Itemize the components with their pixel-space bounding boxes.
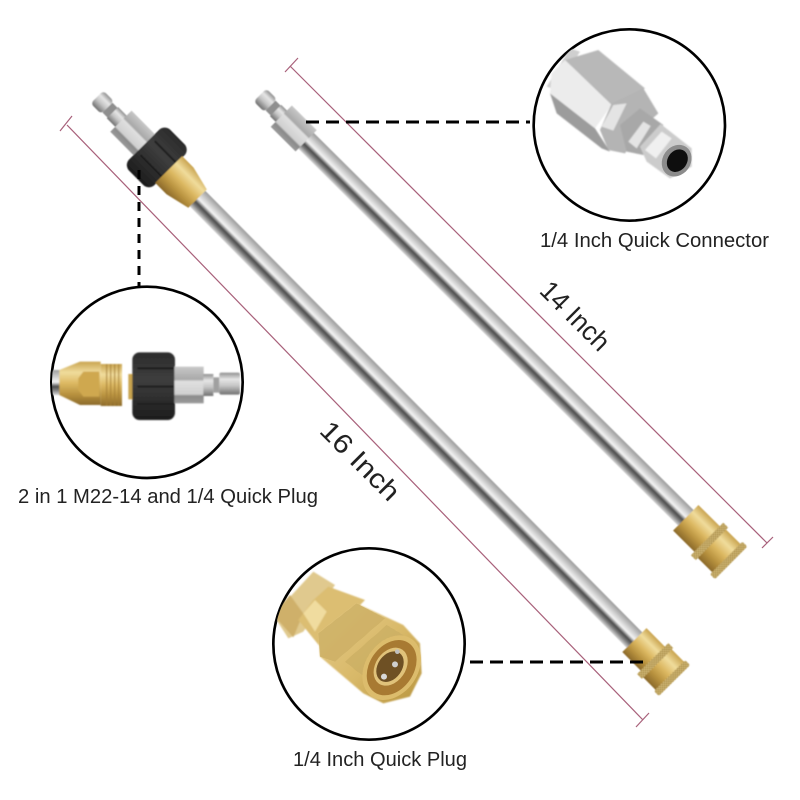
brass thread	[101, 364, 122, 406]
dashed leader: coupler	[138, 170, 140, 286]
quick plug tip	[91, 91, 129, 129]
steel hex	[110, 111, 157, 157]
dimension line: 16 inch	[60, 116, 649, 727]
dashed leader: quick plug	[470, 660, 648, 664]
end quick plug brass	[670, 501, 747, 579]
collar	[600, 88, 658, 153]
label: 16 inch: 16 Inch	[314, 415, 406, 507]
wand: 16 inch with M22 coupler	[76, 77, 695, 701]
label: 14 inch: 14 Inch	[534, 275, 616, 357]
neck	[620, 108, 663, 155]
tube	[295, 129, 695, 527]
label: quick connector: 1/4 Inch Quick Connector	[540, 230, 769, 252]
front hex	[298, 587, 365, 647]
brass collar	[155, 156, 211, 212]
wand: 14 inch	[244, 79, 747, 579]
inset circle: quick connector	[534, 29, 725, 221]
end quick plug brass	[619, 625, 690, 696]
dimension line: 14 inch	[285, 58, 773, 548]
rear hex	[273, 572, 335, 638]
front face	[362, 636, 421, 700]
steel hex	[174, 367, 204, 403]
brass collar	[59, 362, 101, 405]
hex body	[550, 50, 645, 152]
label: quick plug: 1/4 Inch Quick Plug	[293, 749, 467, 771]
black coupler nut	[124, 124, 190, 191]
quick plug tip	[254, 89, 289, 124]
steel hex	[271, 105, 317, 151]
inset circle: 2 in 1 coupler	[50, 287, 243, 478]
plug tip	[640, 124, 692, 178]
black nut	[132, 352, 175, 420]
tube	[188, 189, 644, 649]
steel plug	[203, 373, 240, 396]
label: 2 in 1 coupler: 2 in 1 M22-14 and 1/4 Quick Plug	[18, 486, 318, 508]
inset circle: quick plug	[273, 548, 465, 740]
tube stub	[52, 369, 60, 396]
dashed leader: quick connector	[306, 120, 530, 124]
knurled body	[318, 603, 422, 703]
